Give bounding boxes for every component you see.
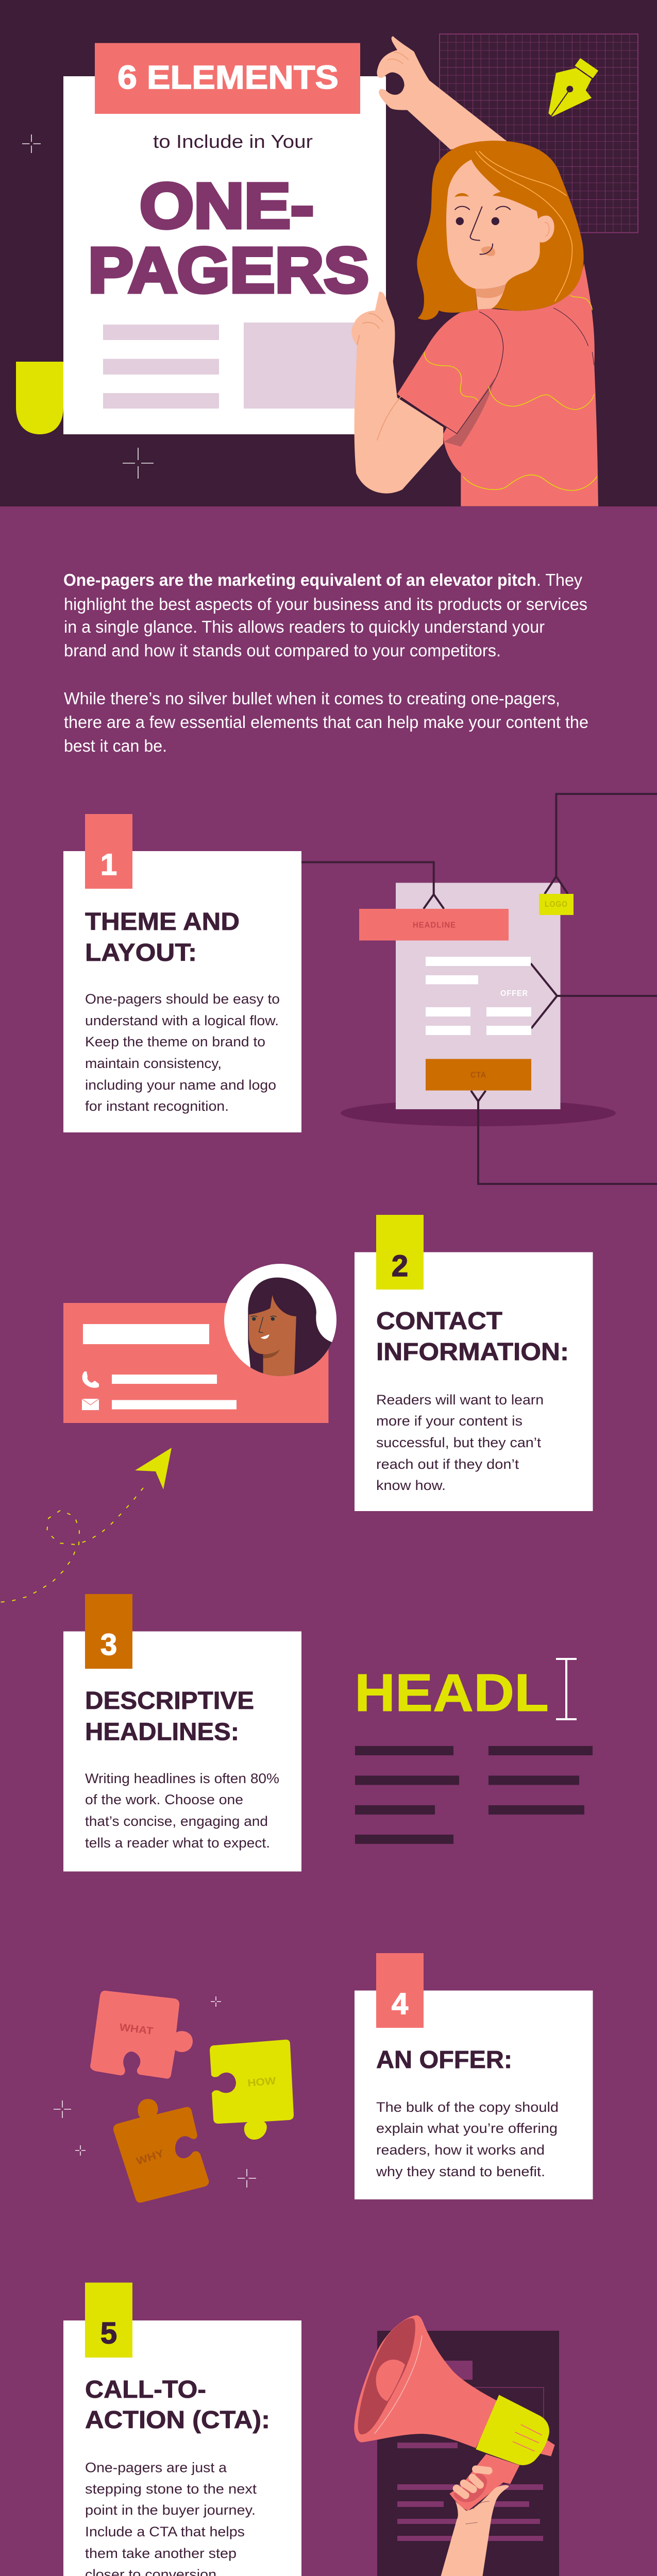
title: one-pagers [88,171,369,306]
illustration: contact card [63,1264,336,1423]
title: one-pagers: PAGERS [88,235,369,306]
sparkles [54,1996,256,2188]
paper sheet [63,76,386,434]
body text [85,2460,257,2576]
number tab: 2 [392,1249,408,1283]
heading: INFORMATION: [376,1338,569,1366]
megaphone [354,2315,555,2576]
dark document [377,2331,559,2576]
heading [85,1687,254,1745]
heading: CALL-TO- [85,2376,206,2403]
diagram: page layout wireframe [301,794,657,1184]
icon: pen nib [548,58,598,116]
icon: mail [82,1399,99,1410]
heading: DESCRIPTIVE [85,1687,254,1715]
shirt details [403,295,594,434]
body text: more if your content is [376,1413,523,1429]
illustration: megaphone on dark page [354,2315,559,2576]
connector: CTA [471,1091,657,1184]
number tab: 3 [100,1628,117,1662]
intro text: best it can be. [64,736,167,755]
heading [85,908,240,967]
body text: that’s concise, engaging and [85,1814,268,1829]
body text: successful, but they can’t [376,1435,542,1450]
number tab [376,1953,424,2028]
number tab [85,2282,132,2358]
text cursor [556,1659,577,1719]
CTA button [426,1059,531,1091]
head and hair [417,141,584,320]
panel: step 5 [63,2282,301,2576]
panel: step 3 [63,1594,301,1871]
body text: them take another step [85,2546,237,2561]
document lines [397,2361,544,2541]
puzzle piece: why: WHY [135,2148,166,2167]
body text: maintain consistency, [85,1056,222,1071]
body text: for instant recognition. [85,1098,229,1114]
body text: The bulk of the copy should [376,2099,559,2115]
text lines [355,1746,593,1844]
heading: LAYOUT: [85,939,197,967]
number tab [85,1594,132,1669]
hand [440,2485,509,2576]
connector: headline [301,862,444,909]
title: one-pagers: ONE- [140,171,314,242]
sparkle [22,134,41,153]
shadow [341,1100,616,1126]
puzzle piece: how [210,2040,294,2140]
subtitle: to Include in Your [153,131,313,152]
panel: step 2 [355,1215,593,1511]
offer lines [426,957,531,1035]
intro text: there are a few essential elements that can help make your content the [64,713,588,732]
body text: stepping stone to the next [85,2481,257,2497]
number tab: 4 [392,1987,408,2021]
number tab: 1 [100,848,117,882]
heading: THEME AND [85,908,240,936]
icon: phone [82,1371,99,1388]
body text: explain what you’re offering [376,2121,558,2136]
CTA button: CTA [470,1071,486,1080]
body text [85,991,280,1114]
intro text: While there’s no silver bullet when it comes to creating one-pagers, [64,689,560,708]
logo tag [539,894,574,915]
body text [85,1771,279,1851]
panel: step 1 [63,814,301,1132]
document [396,883,561,1109]
body text: why they stand to benefit. [376,2164,545,2179]
intro text: highlight the best aspects of your business and its products or services [64,595,587,614]
body text: One-pagers are just a [85,2460,227,2475]
heading [376,1308,569,1366]
title banner: 6 ELEMENTS [117,59,339,96]
connector: logo [545,794,657,894]
puzzle piece: what: WHAT [119,2022,154,2037]
lower arm [351,292,443,494]
icon: cursor arrow [135,1448,172,1489]
intro text: in a single glance. This allows readers to quickly understand your [64,617,545,636]
intro text: . They [536,570,582,589]
headline bar: HEADLINE [413,921,456,929]
illustration: headline typing [355,1659,593,1844]
number tab [85,814,132,889]
email bar [112,1400,237,1410]
number tab [376,1215,424,1290]
shirt [397,264,598,506]
body text: Keep the theme on brand to [85,1034,265,1049]
name bar [83,1324,209,1344]
body text [376,2099,559,2179]
heading [85,2376,270,2434]
offer lines: OFFER [500,989,528,998]
puzzle piece: how: HOW [247,2075,276,2089]
body text: readers, how it works and [376,2142,545,2158]
body text: Readers will want to learn [376,1392,544,1408]
body text: point in the buyer journey. [85,2502,256,2518]
raised arm [377,36,507,149]
placeholder text blocks [103,323,360,409]
body text: reach out if they don’t [376,1456,519,1472]
body text: Include a CTA that helps [85,2524,245,2539]
panel: hero [0,0,657,506]
intro text [63,570,588,755]
body text: of the work. Choose one [85,1792,243,1807]
sparkle [123,448,154,479]
body text: One-pagers should be easy to [85,991,280,1007]
connector: offer [531,963,657,1028]
body text: Writing headlines is often 80% [85,1771,279,1786]
body text [376,1392,544,1493]
dashed trail [0,1488,143,1602]
heading: AN OFFER: [376,2046,512,2074]
number tab: 5 [100,2316,117,2350]
puzzle piece: what [90,1991,193,2079]
heading: HEADLINES: [85,1719,239,1745]
phone bar [112,1375,217,1384]
body text: tells a reader what to expect. [85,1835,270,1851]
title banner [95,43,360,114]
intro text: One-pagers are the marketing equivalent of an elevator pitch [63,570,536,589]
body text: know how. [376,1478,446,1493]
intro text: brand and how it stands out compared to your competitors. [64,641,501,660]
word: HEADL [355,1663,549,1722]
portrait [224,1264,336,1379]
heading: CONTACT [376,1308,502,1335]
logo tag: LOGO [545,900,568,909]
paper curl [16,362,63,434]
body text: including your name and logo [85,1077,276,1093]
character: woman [351,36,598,506]
heading: ACTION (CTA): [85,2406,270,2434]
decorative grid [440,34,638,233]
illustration: puzzle pieces [54,1991,294,2202]
panel: step 4 [355,1953,593,2199]
puzzle piece: why [113,2099,209,2202]
headline bar [359,909,509,941]
body text: understand with a logical flow. [85,1013,279,1028]
